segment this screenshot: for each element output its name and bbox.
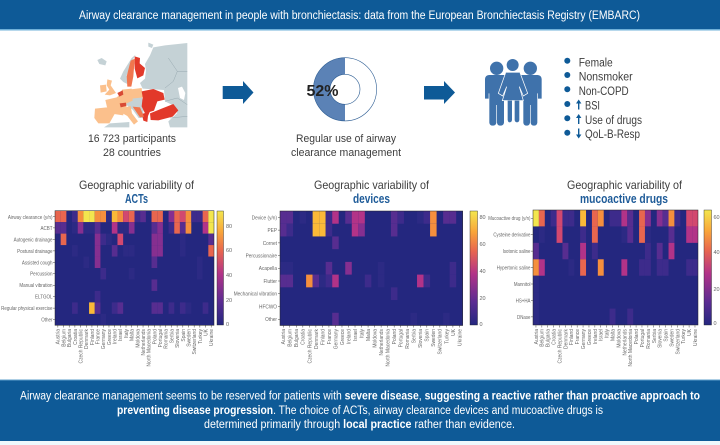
mucoactive country labels: Croatia: [551, 329, 558, 345]
arrow: regular use to patient profile: [424, 81, 455, 104]
mucoactive country labels: Moldova: [616, 329, 623, 348]
ACTs country labels: Czech Republic: [78, 329, 85, 363]
devices row labels: Other: [265, 317, 277, 323]
ACTs colour bar: 20: [226, 298, 232, 304]
mucoactive row labels: HS+HA: [516, 298, 531, 305]
mucoactive country labels: Ukraine: [693, 329, 699, 346]
devices country labels: Greece: [340, 329, 346, 345]
ACTs country labels: Moldova: [135, 329, 141, 348]
ACTs row labels: [1, 215, 53, 324]
heading: devices: Geographic variability of: [314, 178, 430, 192]
conclusion banner: [0, 380, 720, 441]
ACTs row labels: Assisted cough: [22, 260, 53, 267]
mucoactive colour bar: 0: [714, 321, 717, 327]
devices country labels: Portugal: [398, 329, 405, 347]
devices country labels: Germany: [333, 329, 340, 349]
mucoactive country labels: Portugal: [640, 329, 646, 347]
devices country labels: Slovenia: [418, 329, 424, 348]
mucoactive colour bar: 20: [714, 287, 720, 293]
ACTs row labels: Postural drainage: [17, 248, 53, 255]
devices country labels: Switzerland: [437, 329, 444, 354]
devices country labels: Denmark: [313, 329, 320, 349]
devices row labels: [234, 215, 277, 323]
devices row labels: Acapella: [259, 266, 277, 272]
ACTs country labels: Sweden: [186, 329, 193, 347]
ACTs row labels: Manual vibration: [19, 283, 53, 289]
mucoactive colour bar: [704, 210, 720, 327]
mucoactive row labels: Mannitol: [514, 281, 530, 288]
ACTs country labels: Romania: [163, 329, 170, 349]
mucoactive country labels: France: [575, 329, 581, 344]
devices country labels: Bulgaria: [294, 329, 300, 347]
mucoactive colour bar: 60: [714, 215, 720, 221]
devices colour bar: 60: [480, 242, 486, 248]
mucoactive country labels: Austria: [533, 329, 540, 344]
ACTs country labels: Portugal: [158, 329, 164, 347]
patient characteristics list: Use of drugs: [585, 115, 642, 127]
ACTs colour bar: 0: [226, 322, 229, 328]
devices colour bar: [470, 211, 486, 328]
devices country labels: Malta: [366, 329, 372, 341]
patient characteristics list: Non-COPD: [579, 86, 629, 98]
devices row labels: Mechanical vibration: [234, 291, 277, 298]
devices country labels: UK: [450, 329, 457, 336]
devices country labels: Moldova: [372, 329, 379, 348]
patient characteristics list: QoL-B-Resp: [585, 129, 640, 141]
mucoactive country labels: Ireland: [592, 329, 599, 344]
devices country labels: North Macedonia: [385, 329, 392, 366]
ACTs country labels: Belgium: [61, 329, 68, 347]
header banner: Airway clearance management in people with bronchiectasis: data from the European Bronchiectasis Registry (EMBARC): [79, 10, 640, 22]
arrow: participants to regular use: [223, 81, 254, 104]
regular use caption: [291, 133, 401, 159]
icon: group of people: [485, 59, 542, 126]
devices country labels: Israel: [353, 329, 359, 341]
ACTs country labels: France: [95, 329, 102, 344]
conclusion banner: preventing disease progression. The choice of ACTs, airway clearance devices and mucoactive drugs is: [117, 405, 603, 417]
mucoactive country labels: Bulgaria: [545, 329, 552, 347]
ACTs row labels: ELTGOL: [35, 294, 53, 301]
patient characteristics list: BSI: [585, 100, 600, 112]
donut chart: 52 percent: 52%: [306, 83, 338, 100]
mucoactive country labels: UK: [687, 329, 693, 336]
patient characteristics list: [564, 58, 642, 141]
devices colour bar: 80: [480, 215, 486, 221]
ACTs country labels: Croatia: [72, 329, 79, 345]
mucoactive row labels: [488, 216, 531, 321]
heading: ACTs: [79, 178, 195, 206]
ACTs row labels: Airway clearance (y/n): [8, 215, 53, 221]
mucoactive country labels: Denmark: [563, 329, 569, 349]
devices colour bar: 20: [480, 296, 486, 302]
devices country labels: France: [326, 329, 333, 344]
header banner: [0, 0, 720, 30]
devices country labels: Romania: [405, 329, 411, 349]
devices country labels: Serbia: [411, 329, 418, 343]
ACTs colour bar: [217, 211, 232, 328]
mucoactive country labels: Czech Republic: [557, 329, 564, 363]
devices country labels: Finland: [320, 329, 326, 345]
mucoactive country labels: Serbia: [651, 329, 658, 343]
devices row labels: PEP: [267, 228, 277, 234]
ACTs country labels: [55, 329, 215, 366]
ACTs country labels: Spain: [180, 329, 187, 342]
ACTs country labels: Greece: [107, 329, 113, 345]
patient characteristics list: Female: [579, 58, 613, 70]
devices country labels: Belgium: [287, 329, 294, 347]
devices row labels: Flutter: [264, 279, 277, 285]
devices colour bar: 40: [480, 269, 486, 275]
ACTs country labels: Finland: [89, 329, 96, 345]
devices colour bar: 0: [480, 322, 483, 328]
devices row labels: HFCWO: [259, 304, 277, 311]
mucoactive country labels: Sweden: [669, 329, 676, 347]
ACTs country labels: Austria: [55, 329, 62, 344]
ACTs country labels: Serbia: [169, 329, 176, 343]
mucoactive country labels: Romania: [646, 329, 652, 349]
heading: ACTs: Geographic variability of: [79, 178, 195, 192]
regular use caption: clearance management: [291, 147, 401, 159]
devices country labels: Poland: [392, 329, 398, 344]
ACTs country labels: Turkey: [197, 329, 204, 344]
devices country labels: Ireland: [346, 329, 353, 344]
devices country labels: Austria: [281, 329, 287, 344]
mucoactive country labels: Israel: [598, 329, 605, 341]
devices country labels: Italy: [359, 329, 366, 338]
ACTs country labels: Italy: [124, 329, 130, 338]
regular use caption: Regular use of airway: [296, 133, 396, 145]
devices country labels: Czech Republic: [307, 329, 313, 363]
devices country labels: Spain: [424, 329, 431, 342]
mucoactive country labels: [533, 329, 699, 366]
mucoactive country labels: Germany: [581, 329, 587, 349]
heading: ACTs: ACTs: [125, 192, 148, 206]
ACTs country labels: Netherlands: [141, 329, 147, 356]
devices row labels: Device (y/n): [252, 215, 277, 222]
participants caption: [88, 133, 176, 159]
ACTs row labels: Autogenic drainage: [14, 237, 53, 244]
ACTs row labels: Regular physical exercise: [1, 306, 53, 312]
ACTs country labels: Slovenia: [175, 329, 181, 348]
devices row labels: Cornet: [263, 240, 277, 247]
ACTs country labels: Ireland: [112, 329, 119, 344]
ACTs colour bar: 60: [226, 248, 232, 254]
devices country labels: Turkey: [444, 329, 450, 344]
mucoactive row labels: Hypertonic saline: [497, 265, 531, 272]
mucoactive row labels: Mucoactive drug (y/n): [488, 216, 531, 222]
mucoactive row labels: Cysteine derivative: [493, 232, 531, 239]
heatmap: devices: [234, 211, 486, 366]
mucoactive country labels: Finland: [569, 329, 575, 345]
conclusion banner: determined primarily through local practice rather than evidence.: [204, 419, 515, 431]
mucoactive country labels: Switzerland: [675, 329, 681, 354]
heading: mucoactive drugs: mucoactive drugs: [580, 192, 668, 206]
devices country labels: Netherlands: [379, 329, 385, 356]
conclusion banner: Airway clearance management seems to be reserved for patients with severe disease, suggesting a reactive rather than proactive approach to: [20, 390, 700, 402]
ACTs country labels: Switzerland: [192, 329, 198, 354]
devices country labels: Croatia: [300, 329, 307, 345]
heading: devices: devices: [353, 192, 390, 206]
ACTs country labels: North Macedonia: [146, 329, 153, 366]
heatmap: mucoactive drugs: [488, 210, 720, 366]
mucoactive row labels: DNase: [517, 314, 531, 321]
ACTs country labels: Malta: [129, 329, 136, 341]
ACTs row labels: Percussion: [30, 271, 53, 278]
map of participating European countries: [94, 43, 187, 127]
heading: devices: [314, 178, 430, 206]
devices country labels: Sweden: [431, 329, 437, 347]
devices row labels: Percussionaire: [246, 253, 277, 260]
ACTs country labels: Israel: [118, 329, 124, 341]
mucoactive country labels: Greece: [587, 329, 593, 345]
ACTs country labels: Ukraine: [209, 329, 215, 346]
heatmap: ACTs: [1, 211, 232, 366]
participants caption: 16 723 participants: [88, 133, 176, 145]
ACTs colour bar: 40: [226, 273, 232, 279]
ACTs country labels: UK: [203, 329, 210, 336]
heading: mucoactive drugs: Geographic variability of: [567, 178, 683, 192]
ACTs country labels: Bulgaria: [67, 329, 73, 347]
ACTs colour bar: 80: [226, 224, 232, 230]
ACTs country labels: Denmark: [84, 329, 90, 349]
devices country labels: Ukraine: [457, 329, 463, 346]
mucoactive country labels: Turkey: [681, 329, 687, 344]
ACTs row labels: Other: [41, 317, 53, 324]
mucoactive country labels: Italy: [604, 329, 611, 338]
participants caption: 28 countries: [103, 147, 161, 159]
mucoactive country labels: Netherlands: [622, 329, 628, 356]
mucoactive row labels: Isotonic saline: [503, 249, 531, 255]
ACTs row labels: ACBT: [40, 226, 53, 232]
patient characteristics list: Nonsmoker: [579, 72, 633, 84]
heading: mucoactive drugs: [567, 178, 683, 206]
mucoactive country labels: Belgium: [539, 329, 546, 347]
devices country labels: [281, 329, 463, 366]
mucoactive country labels: Slovenia: [657, 329, 664, 348]
ACTs country labels: Germany: [101, 329, 107, 349]
ACTs country labels: Poland: [152, 329, 158, 344]
donut chart: 52 percent: [306, 58, 377, 121]
mucoactive country labels: Spain: [663, 329, 670, 342]
mucoactive country labels: North Macedonia: [628, 329, 634, 366]
mucoactive country labels: Poland: [634, 329, 640, 344]
mucoactive colour bar: 40: [714, 250, 720, 256]
mucoactive country labels: Malta: [610, 329, 617, 341]
